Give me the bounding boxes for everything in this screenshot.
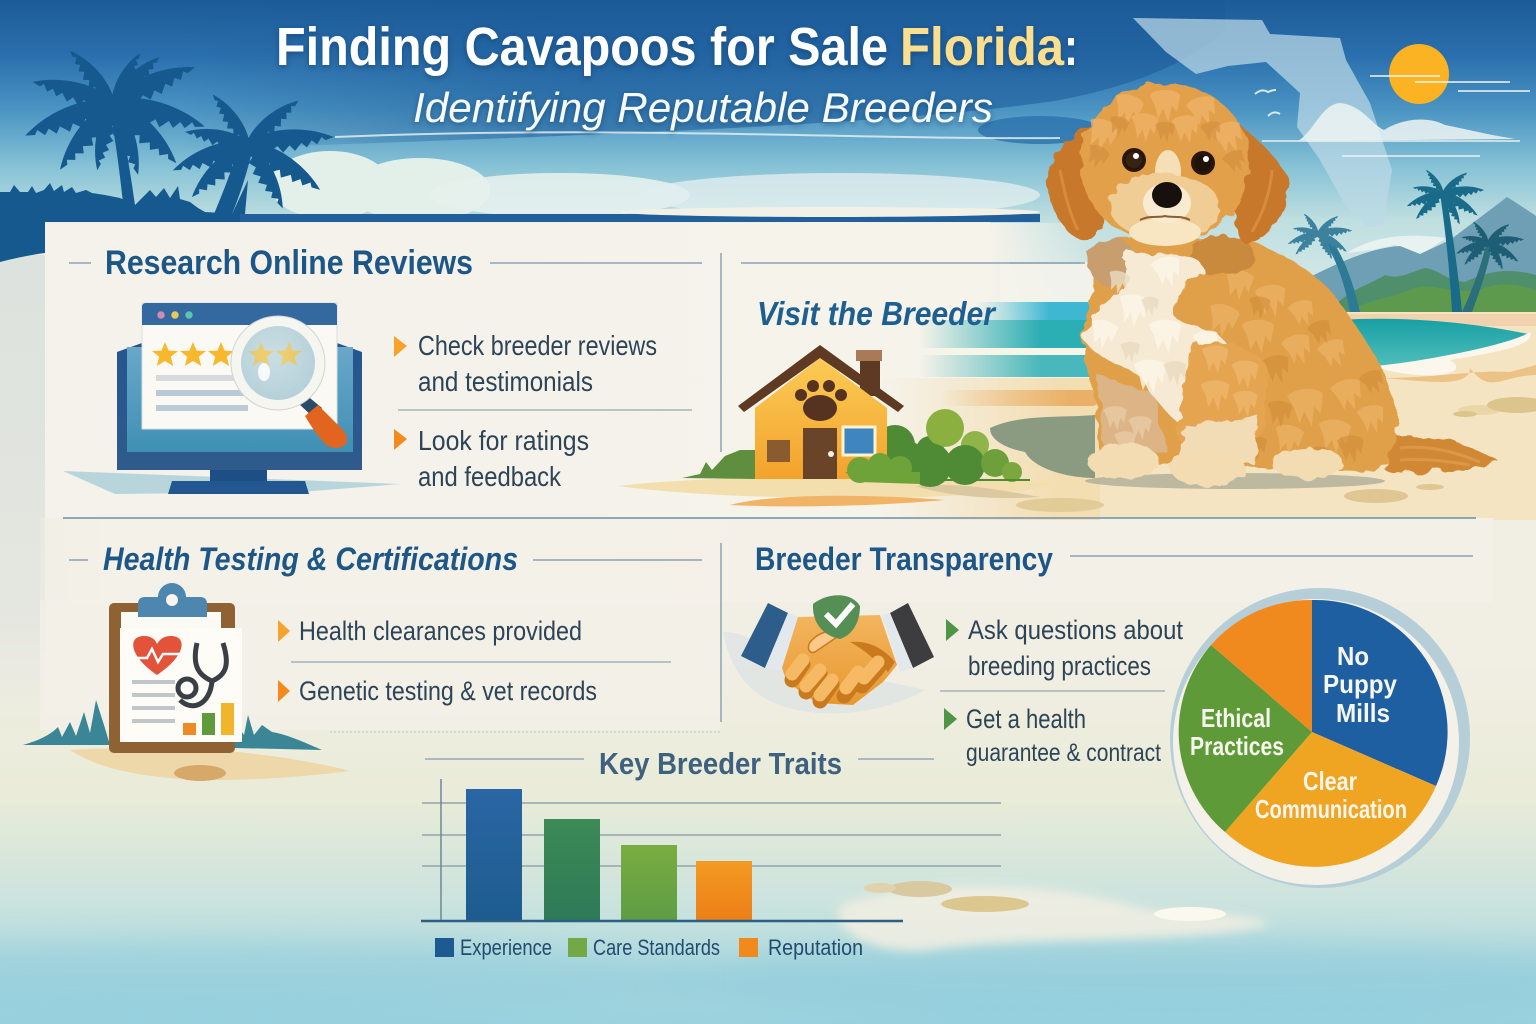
bullet: genetic testing: Genetic testing & vet records [299,676,597,706]
icon: monitor with stars and magnifier [63,303,400,494]
bullet: health guarantee [944,704,1161,767]
palm 2 [169,90,335,214]
map of Florida [1133,18,1392,227]
pie labels: No [1337,641,1369,671]
slice: orange [1211,600,1312,732]
bullet: ask questions: Ask questions about [968,615,1183,645]
pie labels: Puppy [1323,669,1397,699]
chart legend: Experience [460,935,552,960]
bullet: health clearances: Health clearances provided [299,616,582,646]
shoreline with grass [0,183,240,262]
puppy illustration [1045,83,1500,489]
pie labels: Mills [1336,698,1390,728]
palm 1 [21,45,208,212]
scenery right: mountains, palms, sea [1100,168,1536,520]
title: Identifying Reputable Breeders [413,84,993,131]
bullet: look for ratings: and feedback [418,461,562,492]
puppy chest [1084,248,1228,432]
chart legend: Care Standards [593,935,720,960]
chart legend: Reputation [768,935,863,960]
sun [1370,44,1530,104]
heading: breeder transparency: Breeder Transparency [755,541,1053,577]
chart heading: Key Breeder Traits [599,746,842,781]
bullet: check breeder reviews [394,330,657,397]
slice: clear communication [1225,732,1436,867]
puppy paws [1087,443,1343,486]
icon: handshake with check shield [723,595,934,713]
bullet: check breeder reviews: and testimonials [418,366,593,397]
section: breeder transparency [723,541,1473,767]
pie labels: Clear [1303,766,1357,796]
title [276,17,1078,131]
clouds near map [1255,90,1520,255]
pie labels: Communication [1255,794,1407,824]
puppy head [1060,83,1272,246]
puppy neck shading [1088,235,1254,286]
palm trees left [0,45,335,262]
icon: clipboard with heart and stethoscope [23,583,350,781]
icon: breeder house with paw [618,345,1060,506]
bullet: look for ratings [394,425,589,492]
puppy left leg [1097,375,1165,455]
section: visit the breeder [618,295,1060,506]
heading: visit the breeder: Visit the Breeder [757,295,997,332]
pie labels [1190,641,1407,824]
bar chart: key breeder traits [330,732,1001,960]
section: health testing and certifications [23,541,702,781]
slice: ethical practices [1179,645,1312,832]
title: : [1064,17,1078,77]
section: research online reviews [63,244,702,494]
bars [466,789,752,921]
pie labels: Practices [1190,731,1284,761]
puppy tail [1385,434,1500,472]
title: Finding Cavapoos for Sale [276,17,888,77]
puppy body fur tufts [1194,268,1388,470]
pie labels: Ethical [1201,703,1271,733]
bullet: ask questions [946,615,1183,681]
bullet: ask questions: breeding practices [968,651,1151,681]
title: Florida [900,17,1065,77]
panel: content backgrounds [40,223,1493,730]
puppy body [1083,238,1398,472]
bullet: look for ratings: Look for ratings [418,425,589,456]
bullet: check breeder reviews: Check breeder reviews [418,330,657,361]
chart legend [435,935,863,960]
slice: no puppy mills [1312,600,1448,786]
heading: health testing: Health Testing & Certifications [103,541,518,577]
bullet: health guarantee: guarantee & contract [966,739,1161,767]
pie chart [1170,588,1470,888]
heading: research online reviews: Research Online Reviews [105,244,473,282]
puppy ears [1045,125,1290,243]
bullet: health guarantee: Get a health [966,704,1086,734]
beach scene behind Visit the Breeder [880,302,1104,520]
puppy middle leg [1178,342,1268,465]
